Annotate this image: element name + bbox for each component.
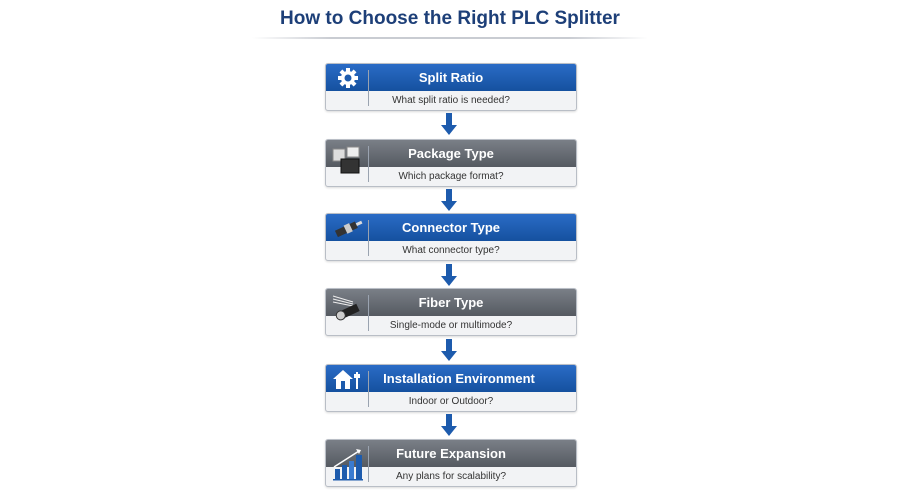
panel: split ratio: Split Ratio bbox=[419, 70, 483, 85]
panel: split ratio: What split ratio is needed? bbox=[392, 95, 510, 106]
icon: fiber cable bbox=[332, 296, 360, 320]
icon: growth chart bbox=[333, 449, 363, 480]
panel: package type bbox=[325, 139, 577, 187]
icon: house bbox=[333, 370, 360, 389]
panel: installation environment: Installation Environment bbox=[383, 371, 535, 386]
panel: connector type: Connector Type bbox=[402, 220, 500, 235]
icon: boxes bbox=[332, 146, 360, 174]
arrow bbox=[441, 113, 457, 135]
panel: future expansion: Any plans for scalability? bbox=[396, 471, 506, 482]
panel: installation environment bbox=[325, 364, 577, 412]
panel: package type: Which package format? bbox=[398, 171, 504, 182]
arrow bbox=[441, 414, 457, 436]
icon: gear bbox=[338, 68, 358, 88]
panel: fiber type: Single-mode or multimode? bbox=[390, 320, 512, 331]
panel: split ratio bbox=[325, 63, 577, 111]
panel: fiber type bbox=[325, 288, 577, 336]
icon: connector bbox=[335, 220, 362, 237]
panel: future expansion: Future Expansion bbox=[396, 446, 506, 461]
arrow bbox=[441, 339, 457, 361]
arrow bbox=[441, 264, 457, 286]
panel: connector type bbox=[325, 213, 577, 261]
arrow bbox=[441, 189, 457, 211]
panel: package type: Package Type bbox=[408, 146, 494, 161]
panel: installation environment: Indoor or Outdoor? bbox=[409, 396, 493, 407]
panel: connector type: What connector type? bbox=[402, 245, 500, 256]
panel: future expansion bbox=[325, 439, 577, 487]
title: How to Choose the Right PLC Splitter bbox=[280, 8, 620, 29]
panel: fiber type: Fiber Type bbox=[419, 295, 483, 310]
